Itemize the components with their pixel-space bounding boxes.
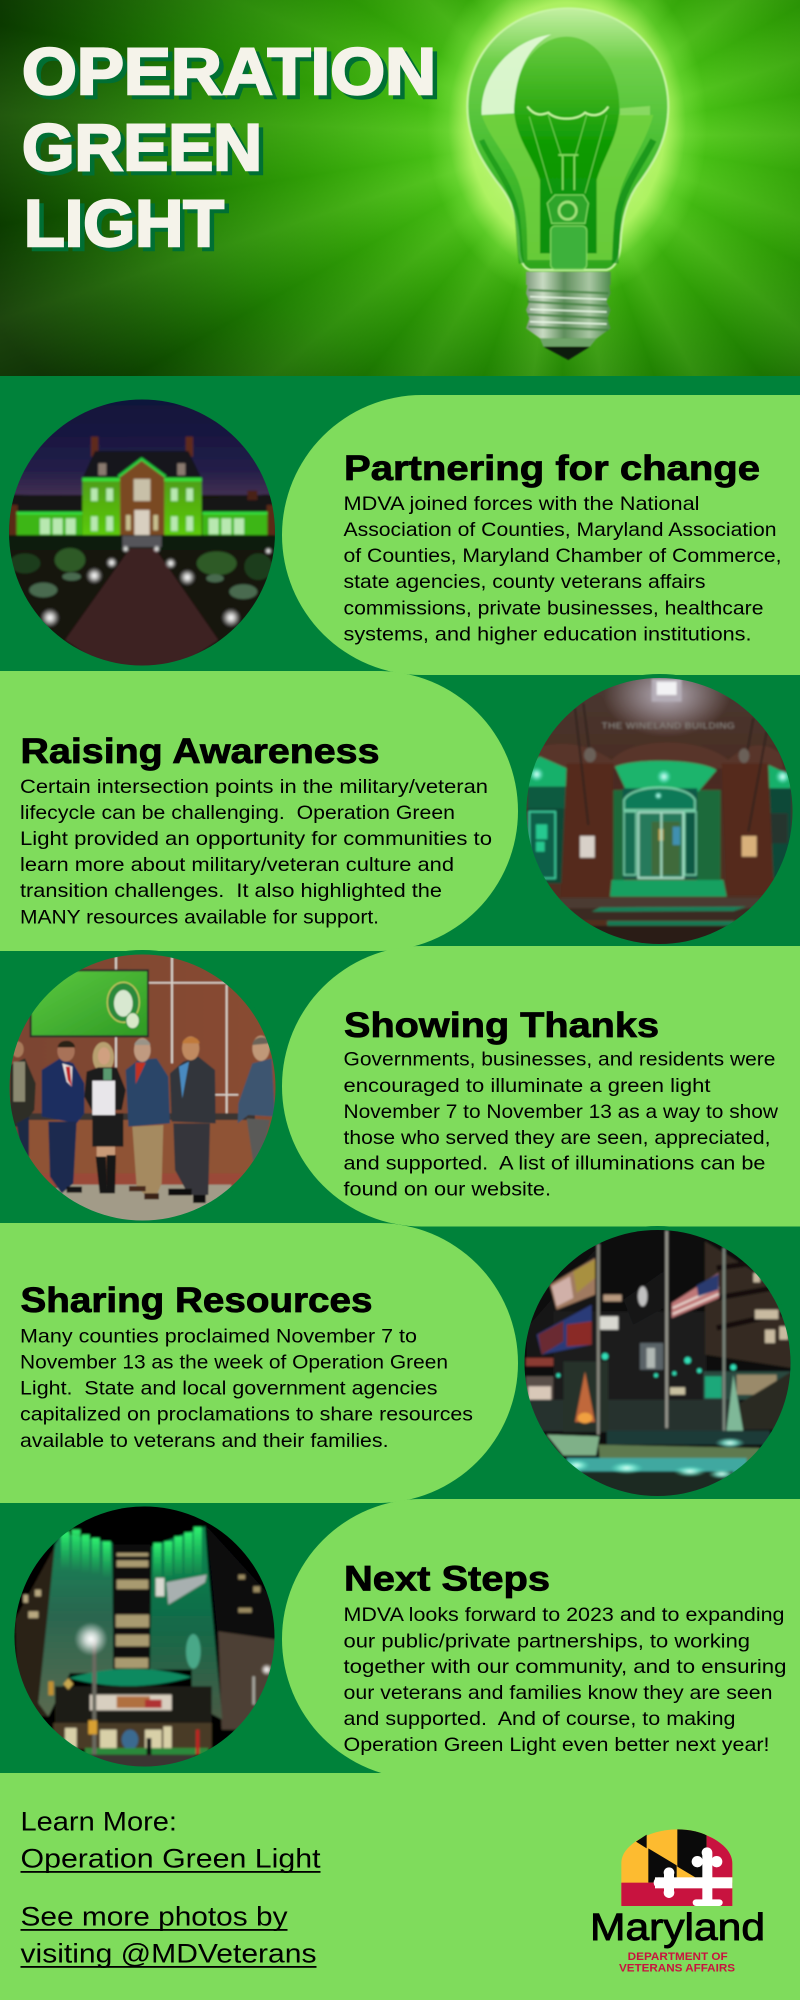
- link: see more photos: See more photos by: [20, 1902, 288, 1932]
- photo: building entrance lit green: [526, 674, 792, 944]
- text block: showing thanks body: November 7 to November 13 as a way to show: [344, 1101, 779, 1123]
- text block: showing thanks body: found on our website.: [344, 1179, 551, 1201]
- text block: next steps body: together with our community, and to ensuring: [344, 1656, 786, 1678]
- panel: Raising Awareness: [0, 671, 518, 951]
- panel: Showing Thanks: [282, 946, 800, 1226]
- title: LIGHT: [28, 190, 228, 264]
- icon: glowing green light bulb: [467, 8, 668, 360]
- panel: Sharing Resources: [0, 1223, 518, 1503]
- text block: raising awareness body: Light provided an opportunity for communities to: [20, 828, 492, 850]
- hero background with light rays: [0, 0, 800, 376]
- text block: sharing resources body: [20, 1326, 473, 1452]
- text block: next steps body: our public/private partnerships, to working: [344, 1630, 750, 1652]
- text block: showing thanks body: [344, 1049, 779, 1201]
- text block: partnering body: MDVA joined forces with the National: [344, 493, 700, 515]
- text block: partnering body: commissions, private businesses, healthcare: [344, 598, 764, 620]
- text block: showing thanks body: Governments, businesses, and residents were: [344, 1049, 776, 1071]
- title: [22, 34, 440, 264]
- text block: raising awareness body: learn more about military/veteran culture and: [20, 854, 454, 876]
- text block: next steps body: and supported. And of course, to making: [344, 1708, 736, 1730]
- title: OPERATION: [26, 38, 440, 112]
- title: GREEN: [22, 110, 262, 184]
- wordmark: department of veterans affairs: DEPARTMENT OF: [628, 1951, 728, 1963]
- heading: Next Steps: Next Steps: [344, 1560, 550, 1599]
- dark green background band: [0, 376, 800, 1773]
- text block: showing thanks body: those who served they are seen, appreciated,: [344, 1127, 770, 1149]
- wordmark: department of veterans affairs: VETERANS AFFAIRS: [619, 1963, 735, 1975]
- text block: partnering body: [344, 493, 782, 646]
- photo: medical center lit green: [14, 1506, 274, 1766]
- text block: raising awareness body: transition challenges. It also highlighted the: [20, 880, 442, 902]
- text block: next steps body: our veterans and families know they are seen: [344, 1682, 772, 1704]
- text block: partnering body: systems, and higher education institutions.: [344, 624, 752, 646]
- photo: illuminated government house at night: [9, 400, 275, 666]
- photo: officials with proclamation: [10, 950, 276, 1220]
- text block: sharing resources body: November 13 as the week of Operation Green: [20, 1352, 448, 1374]
- text block: showing thanks body: and supported. A list of illuminations can be: [344, 1153, 766, 1175]
- text block: next steps body: [344, 1604, 786, 1756]
- text block: sharing resources body: capitalized on proclamations to share resources: [20, 1404, 473, 1426]
- text block: sharing resources body: Light. State and local government agencies: [20, 1378, 438, 1400]
- text block: sharing resources body: available to veterans and their families.: [20, 1430, 388, 1452]
- photo: flags and fountain at night: [524, 1226, 790, 1496]
- learn more label: Learn More:: [20, 1807, 177, 1837]
- heading: Showing Thanks: Showing Thanks: [344, 1006, 659, 1045]
- link: see more photos: [20, 1902, 316, 1969]
- text block: raising awareness body: [20, 776, 492, 928]
- text block: raising awareness body: Certain intersection points in the military/veteran: [20, 776, 488, 798]
- wordmark: department of veterans affairs: [619, 1951, 735, 1975]
- text block: sharing resources body: Many counties proclaimed November 7 to: [20, 1326, 417, 1348]
- logo: Maryland Department of Veterans Affairs: [590, 1829, 765, 1975]
- footer panel: [0, 1773, 800, 2000]
- text block: partnering body: state agencies, county veterans affairs: [344, 571, 706, 593]
- text block: raising awareness body: MANY resources available for support.: [20, 906, 379, 928]
- text block: next steps body: Operation Green Light even better next year!: [344, 1734, 770, 1756]
- text block: raising awareness body: lifecycle can be challenging. Operation Green: [20, 802, 455, 824]
- text block: partnering body: of Counties, Maryland Chamber of Commerce,: [344, 545, 782, 567]
- heading: Sharing Resources: Sharing Resources: [20, 1281, 372, 1320]
- photo: building entrance lit green: THE WINELAND BUILDING: [602, 721, 735, 730]
- panel: Next Steps: [282, 1499, 800, 1779]
- link: Operation Green Light: Operation Green Light: [20, 1844, 321, 1874]
- text block: showing thanks body: encouraged to illuminate a green light: [344, 1075, 711, 1097]
- title: LIGHT: [24, 186, 224, 260]
- link: see more photos: visiting @MDVeterans: [20, 1939, 316, 1969]
- title: OPERATION: [22, 34, 436, 108]
- heading: Partnering for change: Partnering for change: [344, 449, 760, 488]
- title: GREEN: [26, 114, 266, 188]
- panel: Partnering for change: [282, 395, 800, 675]
- wordmark: Maryland: Maryland: [590, 1907, 765, 1949]
- icon: Maryland flag arch: [621, 1829, 732, 1906]
- heading: Raising Awareness: Raising Awareness: [20, 732, 380, 771]
- text block: next steps body: MDVA looks forward to 2023 and to expanding: [344, 1604, 784, 1626]
- text block: partnering body: Association of Counties, Maryland Association: [344, 519, 776, 541]
